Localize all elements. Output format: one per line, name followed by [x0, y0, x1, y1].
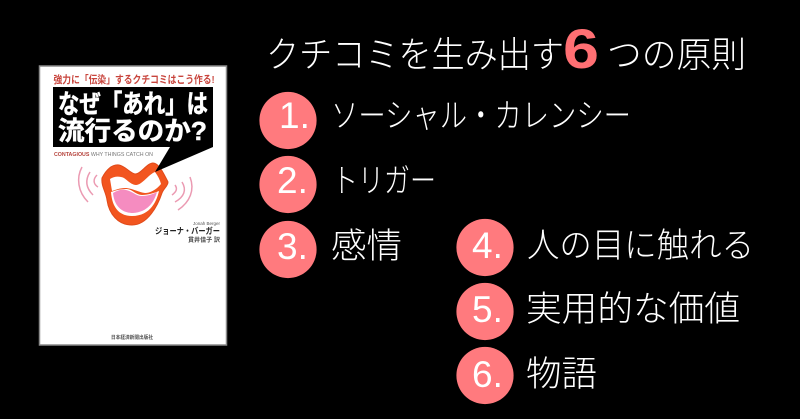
- principle 6: [456, 347, 597, 404]
- book author: ジョーナ・バーガー: [155, 226, 220, 236]
- heading: [266, 17, 746, 80]
- principle 3: 感情: [331, 227, 402, 266]
- book author: [155, 221, 220, 244]
- principle 2: 2.: [277, 160, 308, 201]
- heading: クチコミを生み出す: [266, 34, 564, 75]
- book subtitle: CONTAGIOUS WHY THINGS CATCH ON: [54, 152, 153, 158]
- book title block: なぜ「あれ」は: [58, 89, 208, 119]
- heading: 6: [563, 17, 599, 80]
- principle 5: 実用的な価値: [526, 290, 740, 329]
- book title block: 流行るのか?: [58, 116, 207, 146]
- book publisher: 日本経済新聞出版社: [111, 334, 153, 341]
- principle 5: [456, 283, 740, 340]
- principle 1: [259, 92, 631, 149]
- principle 2: トリガー: [332, 162, 436, 199]
- principle 5: 5.: [472, 289, 503, 330]
- principle 3: [259, 221, 402, 278]
- principle 2: [259, 156, 436, 213]
- principle 1: ソーシャル・カレンシー: [331, 97, 631, 134]
- book title block: [53, 87, 213, 147]
- book cover page: [40, 66, 226, 345]
- speech wedge: [155, 147, 213, 172]
- sound waves right: [172, 177, 192, 210]
- mouth illustration: [102, 163, 168, 225]
- principle 4: 人の目に触れる: [527, 227, 754, 265]
- principle 1: 1.: [279, 95, 310, 136]
- book author: 貫井佳子 訳: [188, 236, 220, 244]
- principle 3: 3.: [277, 226, 308, 267]
- principle 6: 物語: [526, 355, 597, 394]
- book author: Jonah Berger: [193, 221, 220, 226]
- sound waves left: [79, 167, 98, 202]
- heading: つの原則: [607, 34, 746, 75]
- principle 6: 6.: [472, 354, 503, 395]
- book cover: [40, 66, 226, 345]
- principle 4: 4.: [472, 225, 503, 266]
- principle 4: [456, 219, 754, 276]
- book tagline: 強力に「伝染」するクチコミはこう作る!: [54, 73, 214, 86]
